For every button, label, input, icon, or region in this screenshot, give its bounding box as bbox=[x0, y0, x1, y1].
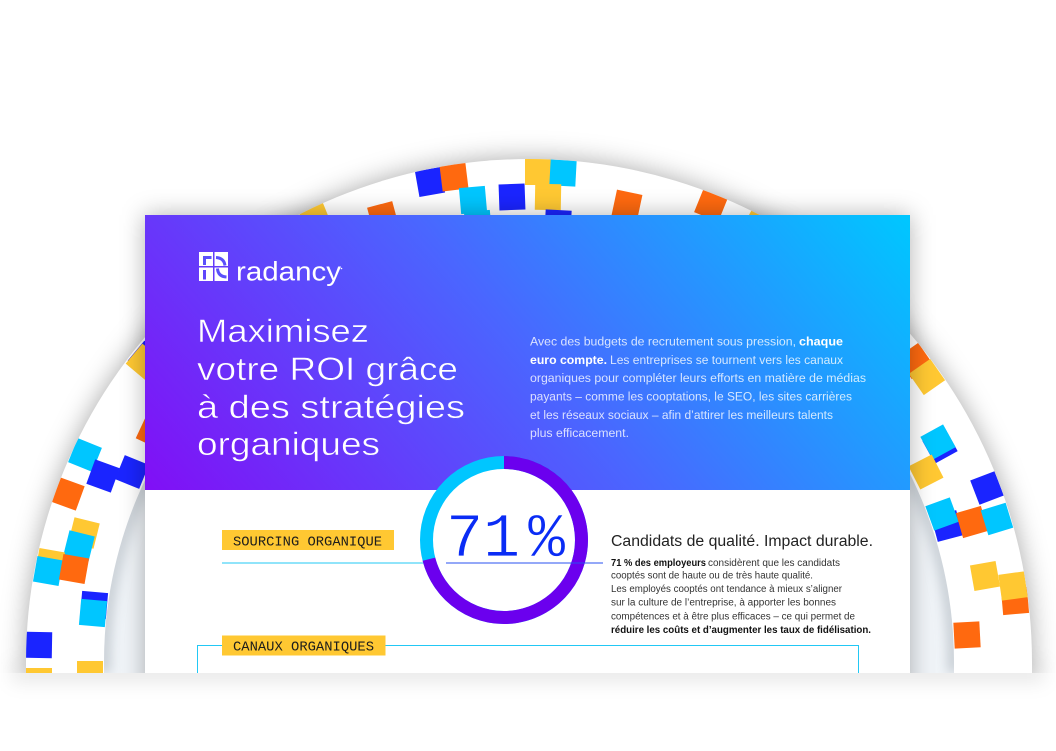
section rule bbox=[222, 562, 428, 564]
title bbox=[197, 313, 465, 462]
arc shadow bbox=[12, 159, 1044, 682]
stat heading: Candidats de qualité. Impact durable. bbox=[611, 533, 873, 550]
title: Maximisez bbox=[197, 313, 369, 349]
intro text: Avec des budgets de recrutement sous pression, bbox=[530, 334, 796, 348]
section tag: canaux organiques bbox=[222, 636, 386, 656]
intro text: organiques pour compléter leurs efforts en matière de médias bbox=[530, 371, 866, 385]
stat body text: compétences et à être plus efficaces – ce qui permet de bbox=[611, 612, 855, 622]
stat body text bbox=[611, 558, 871, 636]
intro text: Les entreprises se tournent vers les canaux bbox=[610, 353, 844, 367]
title: à des stratégies bbox=[197, 389, 465, 425]
panel: semicircular ring of coloured squares bbox=[26, 159, 1032, 694]
logo wordmark: radancy bbox=[236, 256, 342, 286]
section tag: sourcing organique bbox=[222, 530, 394, 550]
intro text: euro compte. bbox=[530, 353, 607, 367]
section tag: canaux organiques: CANAUX ORGANIQUES bbox=[233, 640, 374, 656]
header band bbox=[145, 215, 910, 490]
stat body text: Les employés cooptés ont tendance à mieux s’aligner bbox=[611, 584, 843, 595]
stat body text: sur la culture de l’entreprise, à apporter les bonnes bbox=[611, 598, 836, 608]
title: organiques bbox=[197, 426, 380, 462]
intro text: payants – comme les cooptations, le SEO, les sites carrières bbox=[530, 390, 852, 404]
inner disc bbox=[104, 474, 954, 673]
panel: document page bbox=[145, 215, 910, 673]
stat rule bbox=[446, 562, 603, 564]
panel shadow bbox=[145, 215, 910, 695]
donut chart: 71 % bbox=[426, 462, 582, 618]
title: votre ROI grâce bbox=[197, 351, 458, 387]
box: canaux organiques bbox=[198, 636, 858, 673]
intro text: chaque bbox=[799, 334, 843, 348]
intro text bbox=[530, 334, 866, 440]
stat body text: considèrent que les candidats bbox=[708, 558, 840, 569]
donut value: 71 % bbox=[446, 504, 566, 575]
intro text: plus efficacement. bbox=[530, 426, 629, 440]
section tag: sourcing organique: SOURCING ORGANIQUE bbox=[233, 536, 382, 550]
stat body text: réduire les coûts et d’augmenter les taux de fidélisation. bbox=[611, 625, 871, 636]
stat body text: 71 % des employeurs bbox=[611, 558, 706, 569]
intro text: et les réseaux sociaux – afin d’attirer les meilleurs talents bbox=[530, 408, 833, 422]
logo dot bbox=[341, 268, 342, 269]
stat body text: cooptés sont de haute ou de très haute qualité. bbox=[611, 570, 813, 582]
coloured squares bbox=[26, 159, 1029, 694]
icon: radancy logo mark bbox=[199, 252, 228, 281]
